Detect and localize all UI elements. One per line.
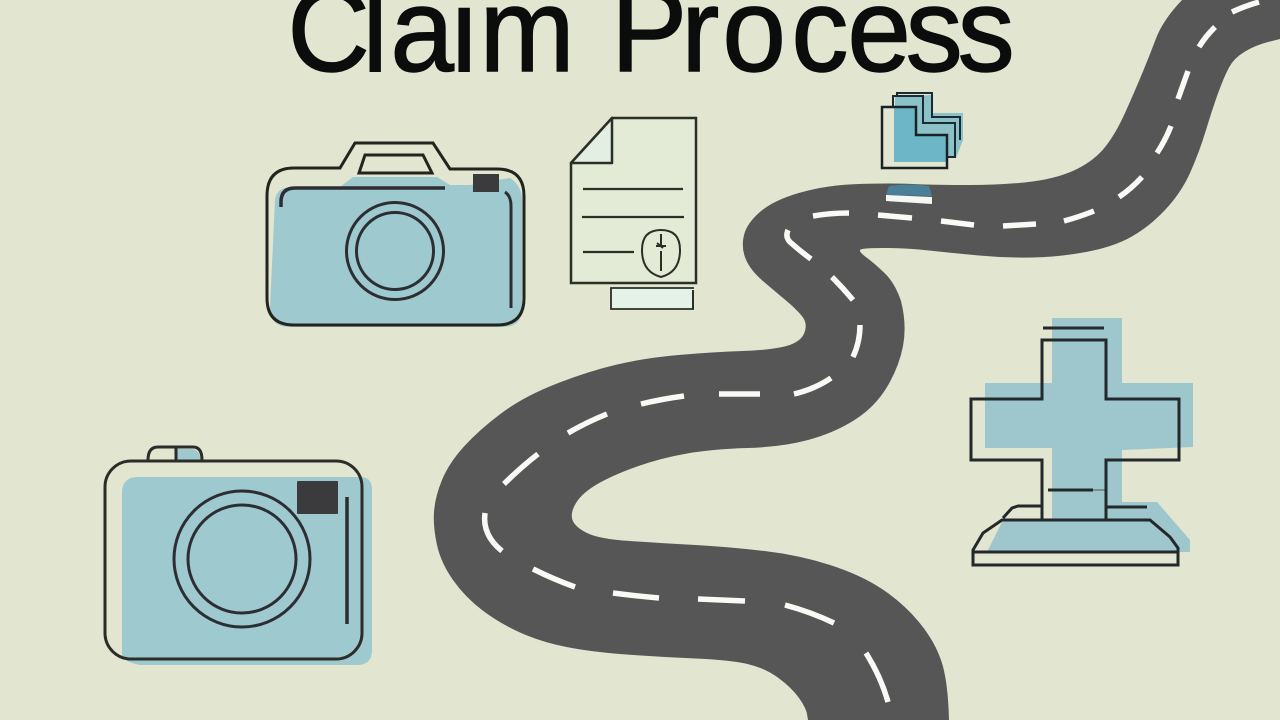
icon: document [571, 118, 696, 309]
road [434, 0, 1280, 720]
road centre dashes [485, 2, 1259, 702]
icon: camera upper [267, 143, 524, 327]
icon: medical cross [971, 318, 1193, 565]
blue tab on road [886, 184, 932, 204]
title [287, 0, 1015, 97]
icon: large camera lower left [105, 447, 372, 665]
icon: stacked pages [882, 93, 963, 204]
